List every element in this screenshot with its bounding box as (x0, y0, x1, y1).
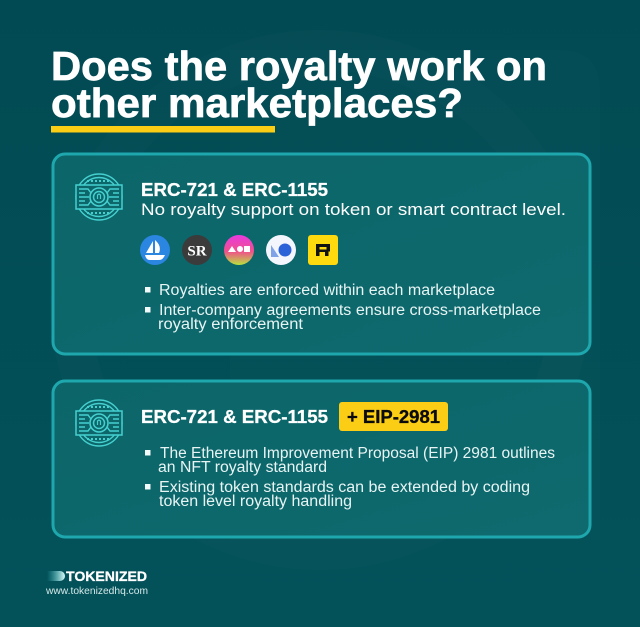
icon: SuperRare (182, 235, 212, 265)
badge: EIP-2981 (339, 402, 448, 431)
heading: token standards: ERC-721 & ERC-1155 (141, 179, 328, 200)
title: other marketplaces? (51, 80, 463, 126)
bullet list: Inter-company agreements ensure cross-marketplace (159, 302, 541, 319)
footer logo (45, 568, 148, 597)
badge: EIP-2981: + EIP-2981 (347, 407, 440, 427)
bullet list: an NFT royalty standard (158, 459, 327, 476)
bullet list (145, 445, 555, 510)
icon: coin (76, 174, 122, 220)
website: www.tokenizedhq.com (45, 585, 148, 597)
bullet list: The Ethereum Improvement Proposal (EIP) 2981 outlines (160, 445, 555, 462)
subheading: No royalty support on token or smart contract level. (141, 200, 566, 219)
title: Does the royalty work on (51, 43, 547, 89)
icon: Foundation-style colour logo (224, 235, 254, 265)
icon: SuperRare: SR (187, 244, 207, 260)
icon: OpenSea (140, 235, 170, 265)
icon: Tokenized swoosh (47, 571, 65, 581)
title (51, 43, 547, 126)
bullet list (145, 282, 541, 333)
marketplace logos (140, 235, 338, 265)
icon: Rarible (308, 235, 338, 265)
bullet list: royalty enforcement (158, 316, 304, 333)
panel: EIP-2981 (53, 381, 590, 537)
icon: Mintable-style shapes logo (266, 235, 296, 265)
icon: coin (76, 400, 122, 446)
bullet list: Royalties are enforced within each marketplace (159, 282, 495, 299)
heading: token standards: ERC-721 & ERC-1155 (141, 406, 328, 427)
title underline (51, 126, 275, 132)
panel: no royalty support (53, 154, 590, 354)
bullet list: Existing token standards can be extended by coding (159, 479, 530, 496)
bullet list: token level royalty handling (159, 493, 352, 510)
brand name: TOKENIZED (66, 568, 147, 584)
